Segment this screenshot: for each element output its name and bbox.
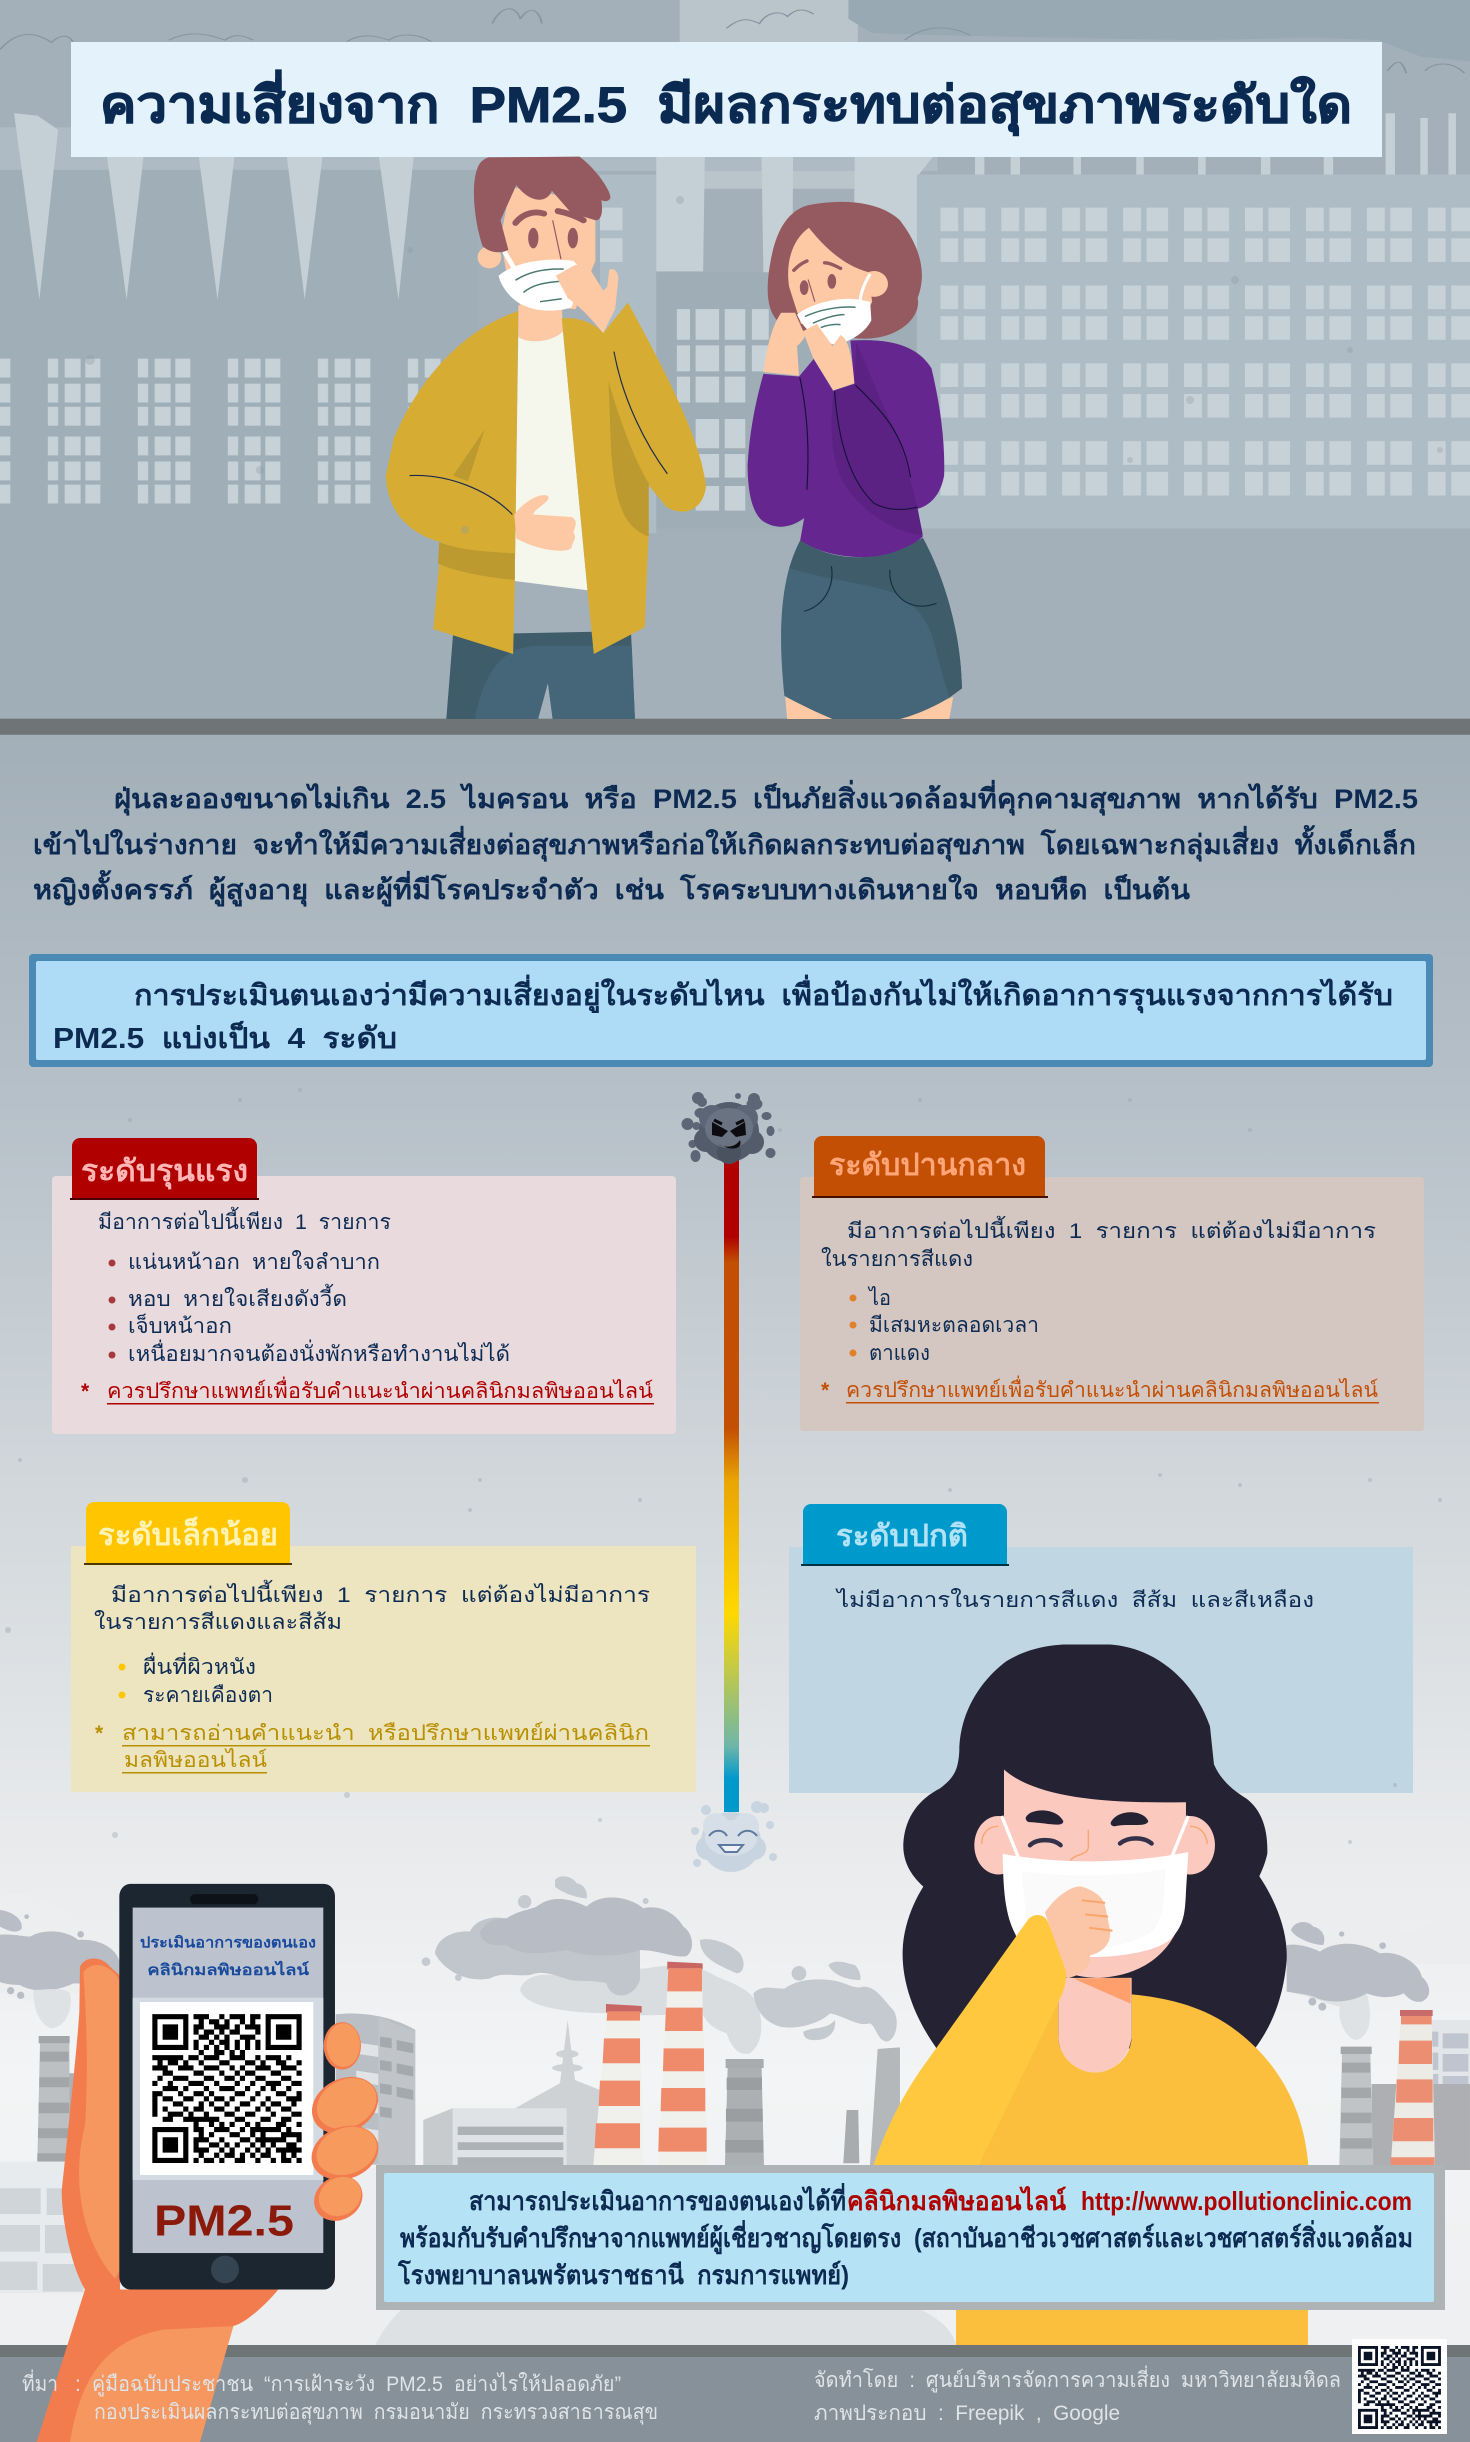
symptoms: severe [98,1207,510,1366]
right chimneys and smoke [1287,1906,1470,2170]
illustration: woman coughing with mask [873,1644,1308,2166]
footer: producer credit: ภาพประกอบ : Freepik , Google [814,2402,1120,2425]
footer: source credit: ที่มา [22,2369,58,2396]
symptoms: moderate: ในรายการสีแดง [821,1247,973,1271]
symptoms: moderate: ไอ [867,1286,891,1310]
advice: mild: มลพิษออนไลน์ [124,1748,267,1772]
callout: online clinic: คลินิกมลพิษออนไลน์ [847,2185,1066,2216]
man [386,157,706,719]
callout: online clinic: http://www.pollutionclinic.com [1081,2186,1412,2216]
phone: คลินิกมลพิษออนไลน์ [147,1960,309,1979]
left chimney and smoke [0,1894,120,2293]
illustration: hand holding phone [37,1884,385,2442]
advice: moderate: ควรปรึกษาแพทย์เพื่อรับคำแนะนำผ่านคลินิกมลพิษออนไลน์ [846,1375,1378,1402]
footer: source credit [22,2369,658,2425]
heading tab: severe [70,1138,259,1200]
advice: moderate: * [821,1379,830,1402]
symptoms: mild: ผื่นที่ผิวหนัง [143,1652,256,1679]
intro paragraph: หญิงตั้งครรภ์ ผู้สูงอายุ และผู้ที่มีโรคประจำตัว เช่น โรคระบบทางเดินหายใจ หอบหืด เป็นต้น [33,869,1191,907]
footer QR code [1352,2339,1447,2434]
heading tab: mild [84,1502,292,1565]
floating dust particles [5,196,1443,1844]
icon: happy dust [691,1801,777,1872]
heading tab: normal [801,1504,1009,1566]
central chimneys and smoke [378,1876,900,2165]
intro paragraph [33,779,1418,907]
advice: mild [95,1721,650,1774]
chimney: tall [658,1962,707,2165]
chimney: grey [725,2059,764,2165]
phone text: ประเมินอาการของตนเอง [140,1934,316,1952]
symptoms: moderate: มีอาการต่อไปนี้เพียง 1 รายการ แต่ต้องไม่มีอาการ [847,1216,1376,1243]
intro paragraph: เข้าไปในร่างกาย จะทำให้มีความเสี่ยงต่อสุขภาพหรือก่อให้เกิดผลกระทบต่อสุขภาพ โดยเฉพาะกลุ่มเสี่ยง ทั้งเด็กเล็ก [33,824,1416,862]
callout: online clinic: โรงพยาบาลนพรัตนราชธานี กรมการแพทย์) [397,2259,849,2290]
symptoms: mild: ในรายการสีแดงและสีส้ม [94,1610,342,1634]
symptoms: severe: เหนื่อยมากจนต้องนั่งพักหรือทำงานไม่ได้ [128,1339,510,1366]
callout: self assessment intro: การประเมินตนเองว่ามีความเสี่ยงอยู่ในระดับไหน เพื่อป้องกันไม่ให้เกิดอาการรุนแรงจากการได้รับ [134,974,1393,1013]
heading tab: moderate: ระดับปานกลาง [829,1149,1026,1182]
panel: mild [71,1502,696,1792]
advice: severe: * [81,1380,90,1403]
symptoms: severe: หอบ หายใจเสียงดังวี้ด [128,1284,347,1311]
phone [119,1884,335,2290]
callout: self assessment intro: PM2.5 แบ่งเป็น 4 ระดับ [53,1020,397,1055]
callout: online clinic: สามารถประเมินอาการของตนเองได้ที่ [469,2182,846,2216]
footer: source credit: คู่มือฉบับประชาชน “การเฝ้าระวัง PM2.5 อย่างไรให้ปลอดภัย” [92,2372,621,2397]
phone label: PM2.5 [154,2196,294,2245]
heading tab: normal: ระดับปกติ [836,1520,968,1553]
illustration: grey city skyline [0,0,1470,735]
advice: severe: ควรปรึกษาแพทย์เพื่อรับคำแนะนำผ่านคลินิกมลพิษออนไลน์ [107,1376,653,1403]
advice: mild: * [95,1722,104,1745]
heading tab: severe: ระดับรุนแรง [81,1155,248,1190]
panel: moderate [800,1136,1424,1431]
symptoms: mild [94,1580,650,1707]
callout: online clinic [376,2165,1445,2310]
heading tab: moderate [812,1136,1048,1198]
QR code [140,2002,313,2175]
footer: producer credit: จัดทำโดย : ศูนย์บริหารจัดการความเสี่ยง มหาวิทยาลัยมหิดล [814,2365,1341,2393]
footer: source credit: กองประเมินผลกระทบต่อสุขภาพ กรมอนามัย กระทรวงสาธารณสุข [94,2401,658,2425]
illustration: factories and smoke [0,1876,1470,2346]
sweater below callout [956,2165,1308,2347]
panel: severe [52,1138,676,1434]
fingers [305,2022,385,2228]
callout: self assessment intro [29,954,1433,1067]
heading tab: mild: ระดับเล็กน้อย [98,1516,278,1552]
symptoms: moderate: ตาแดง [869,1342,930,1365]
severity gradient bar [724,1150,739,1812]
symptoms: severe: แน่นหน้าอก หายใจลำบาก [128,1250,380,1274]
chimney: short [593,2004,643,2165]
advice: mild: สามารถอ่านคำแนะนำ หรือปรึกษาแพทย์ผ่านคลินิก [122,1721,649,1745]
symptoms: mild: มีอาการต่อไปนี้เพียง 1 รายการ แต่ต้องไม่มีอาการ [111,1580,650,1607]
symptoms: moderate: มีเสมหะตลอดเวลา [869,1314,1039,1337]
symptoms: moderate [821,1216,1376,1365]
title banner: ความเสี่ยงจาก PM2.5 มีผลกระทบต่อสุขภาพระดับใด [100,70,1352,136]
footer: producer credit [814,2365,1341,2425]
footer band [0,2345,1470,2442]
symptoms: severe: เจ็บหน้าอก [128,1312,232,1338]
text: no symptoms: ไม่มีอาการในรายการสีแดง สีส้ม และสีเหลือง [835,1588,1314,1612]
icon: angry dust [682,1092,776,1164]
intro paragraph: ฝุ่นละอองขนาดไม่เกิน 2.5 ไมครอน หรือ PM2.5 เป็นภัยสิ่งแวดล้อมที่คุกคามสุขภาพ หากได้รับ PM2.5 [114,779,1418,816]
symptoms: severe: มีอาการต่อไปนี้เพียง 1 รายการ [98,1207,391,1234]
panel: normal [789,1504,1413,1793]
illustration: man and woman wearing masks [386,157,962,719]
title banner [71,42,1382,157]
symptoms: mild: ระคายเคืองตา [143,1684,273,1707]
woman [748,202,962,719]
footer: source credit: : [75,2373,81,2396]
